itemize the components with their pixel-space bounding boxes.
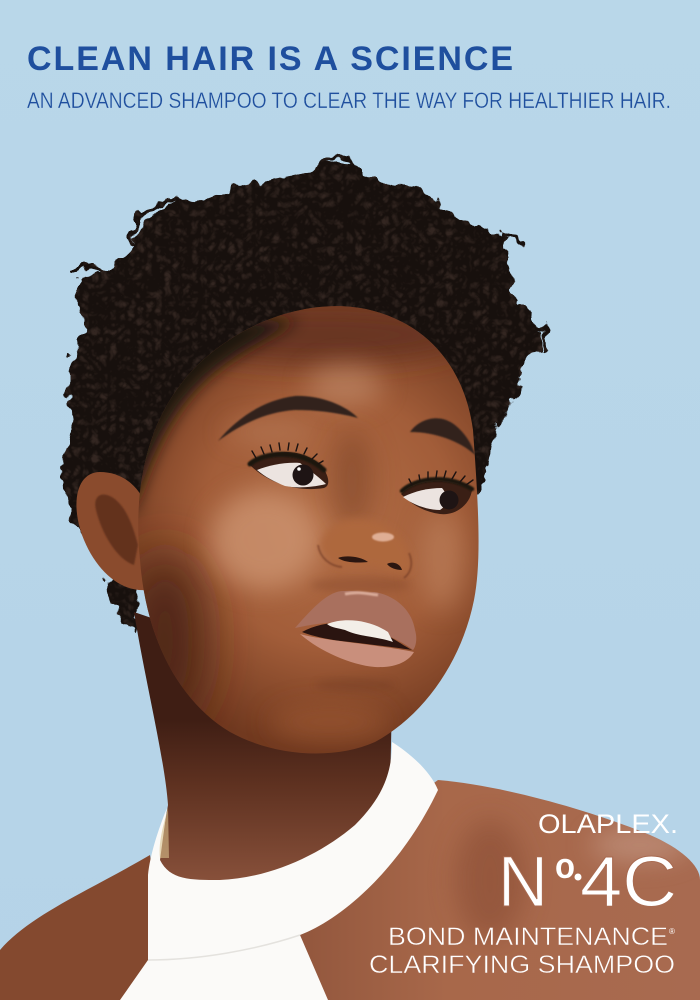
eye: left bbox=[250, 443, 328, 489]
product description: CLARIFYING SHAMPOO bbox=[369, 951, 675, 979]
face bbox=[120, 306, 479, 753]
product number: 4C bbox=[580, 843, 677, 922]
product description bbox=[369, 923, 675, 979]
halter top bbox=[120, 742, 438, 1000]
ear bbox=[76, 472, 150, 590]
teeth bbox=[327, 620, 393, 642]
hair bbox=[62, 157, 547, 630]
shoulder highlight bbox=[455, 820, 690, 940]
right shoulder bbox=[240, 780, 700, 1000]
nose bbox=[318, 519, 412, 578]
brand name: OLAPLEX. bbox=[538, 809, 678, 839]
title: CLEAN HAIR IS A SCIENCE bbox=[27, 40, 513, 78]
lips bbox=[295, 591, 416, 667]
eyebrow: right bbox=[410, 418, 475, 455]
eyebrow: left bbox=[218, 396, 358, 441]
logo: Olaplex No.4C bbox=[369, 809, 678, 979]
product description: ® bbox=[669, 927, 675, 936]
neck bbox=[134, 612, 392, 900]
temple hair shadow bbox=[120, 320, 300, 520]
product number bbox=[498, 843, 677, 922]
eye: right bbox=[401, 471, 473, 514]
product number: o bbox=[555, 845, 575, 886]
product number: N bbox=[498, 843, 548, 922]
product description: BOND MAINTENANCE bbox=[388, 923, 668, 951]
left shoulder bbox=[0, 855, 170, 1000]
